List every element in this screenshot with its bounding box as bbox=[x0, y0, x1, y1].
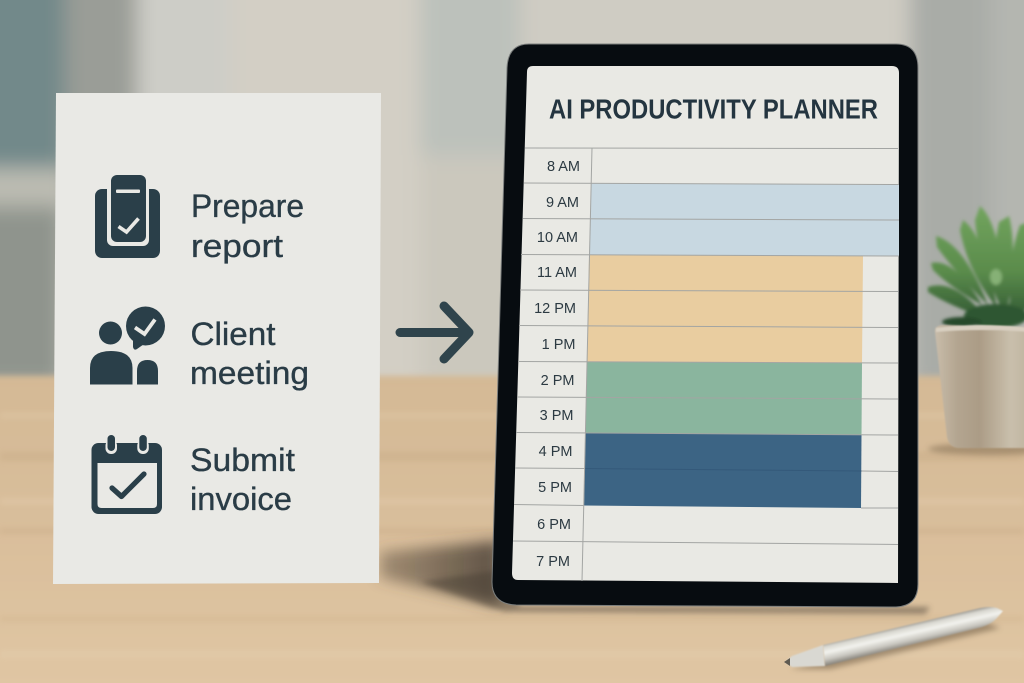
time labels bbox=[534, 159, 580, 570]
label: client meeting: Client bbox=[190, 316, 276, 352]
blurred background wall bbox=[0, 0, 1024, 390]
time labels: 7 PM bbox=[536, 554, 570, 570]
card sheet bbox=[53, 93, 381, 584]
time labels: 10 AM bbox=[537, 230, 578, 246]
icon: clipboard with check bbox=[95, 172, 160, 258]
task: client meeting bbox=[90, 306, 309, 391]
wood grain bbox=[0, 412, 1024, 658]
icon: calendar with check bbox=[92, 435, 162, 514]
label: prepare report: report bbox=[191, 228, 283, 264]
wooden table bbox=[0, 376, 1024, 683]
label: submit invoice: Submit bbox=[190, 442, 295, 478]
tablet bbox=[492, 44, 918, 607]
block: orange bbox=[587, 254, 863, 363]
time labels: 8 AM bbox=[547, 159, 580, 175]
icon: pot bbox=[935, 325, 1024, 448]
icon: leaves bbox=[928, 206, 1024, 328]
pen tip bbox=[784, 658, 790, 666]
pen shadow bbox=[790, 622, 1000, 669]
pen nose bbox=[785, 645, 825, 667]
time labels: 1 PM bbox=[542, 337, 576, 353]
block: navy bbox=[584, 433, 862, 508]
pen bbox=[784, 607, 1003, 669]
time labels: 4 PM bbox=[539, 444, 572, 460]
label: submit invoice: invoice bbox=[190, 481, 292, 517]
icon: people with speech bubble bbox=[90, 306, 165, 384]
planner title: AI PRODUCTIVITY PLANNER bbox=[549, 94, 878, 124]
plant bbox=[928, 206, 1024, 455]
tablet frame bbox=[492, 44, 918, 607]
task: submit invoice bbox=[92, 435, 295, 517]
planner schedule bbox=[513, 148, 899, 581]
time labels: 9 AM bbox=[546, 195, 579, 211]
pen body bbox=[823, 607, 1003, 666]
tablet screen bbox=[512, 66, 899, 583]
label: client meeting: meeting bbox=[190, 355, 309, 391]
pot shadow bbox=[928, 443, 1024, 455]
time labels: 2 PM bbox=[541, 373, 574, 389]
arrow bbox=[400, 306, 469, 359]
label: prepare report: Prepare bbox=[191, 188, 304, 224]
time labels: 11 AM bbox=[537, 265, 577, 281]
time labels: 12 PM bbox=[534, 301, 576, 317]
time labels: 5 PM bbox=[538, 480, 572, 496]
task card bbox=[53, 93, 381, 584]
grid lines bbox=[513, 148, 899, 581]
time labels: 6 PM bbox=[537, 517, 571, 533]
task: prepare report bbox=[95, 172, 304, 264]
block: light blue bbox=[589, 184, 899, 256]
tablet shadow bbox=[380, 540, 930, 614]
block: green bbox=[586, 362, 862, 435]
time labels: 3 PM bbox=[540, 408, 574, 424]
